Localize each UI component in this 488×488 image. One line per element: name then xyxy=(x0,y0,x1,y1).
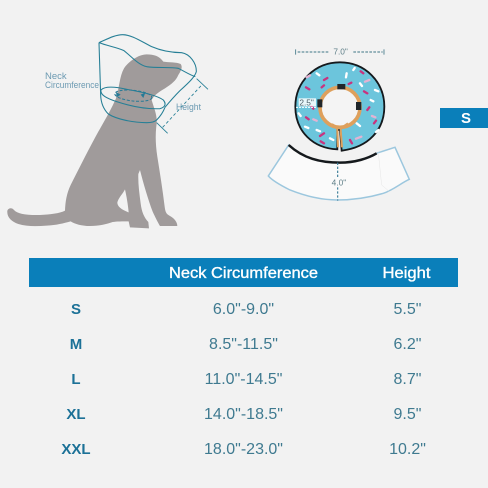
row S: S xyxy=(71,301,81,318)
row M xyxy=(70,336,421,353)
straps xyxy=(337,84,345,89)
label: neck circumference: Neck xyxy=(45,71,67,82)
row L: L xyxy=(71,371,81,388)
row S xyxy=(71,301,421,318)
height dimension 4.0: 4.0" xyxy=(332,177,346,187)
label: 2.5: 2.5" xyxy=(299,98,314,108)
inner ring xyxy=(320,87,360,127)
collar diagram xyxy=(268,47,409,201)
row S: 5.5" xyxy=(394,301,421,318)
height dimension xyxy=(157,79,208,133)
dog diagram with cone: Circumference xyxy=(45,80,99,91)
size table xyxy=(29,258,458,458)
row XL: 9.5" xyxy=(394,406,421,423)
table header: Neck Circumference xyxy=(169,265,318,282)
row L xyxy=(71,371,421,388)
row XL: XL xyxy=(66,406,86,423)
cone outline xyxy=(99,35,196,123)
row L: 8.7" xyxy=(394,371,421,388)
row S: 6.0"-9.0" xyxy=(213,301,274,318)
row M: 6.2" xyxy=(394,336,421,353)
row M: 8.5"-11.5" xyxy=(209,336,278,353)
label: height: Height xyxy=(176,102,201,113)
row XL: 14.0"-18.5" xyxy=(204,406,283,423)
row XXL: 18.0"-23.0" xyxy=(204,441,283,458)
dog diagram with cone xyxy=(7,35,208,228)
height dimension 4.0 xyxy=(332,163,346,201)
neck circumference arrows xyxy=(114,88,152,103)
row XXL: 10.2" xyxy=(389,441,426,458)
row XL xyxy=(66,406,421,423)
dog silhouette xyxy=(7,54,182,228)
table header xyxy=(29,258,458,287)
donut collar xyxy=(295,62,384,151)
size tab xyxy=(440,108,488,128)
width dimension 7.0: 7.0" xyxy=(333,47,348,57)
open cone piece xyxy=(268,145,409,200)
row XXL: XXL xyxy=(61,441,91,458)
sprinkles xyxy=(299,68,378,143)
row XXL xyxy=(61,441,426,458)
width dimension 7.0 xyxy=(296,47,384,57)
table header: Height xyxy=(382,265,431,282)
size tab: S xyxy=(461,110,471,127)
row L: 11.0"-14.5" xyxy=(205,371,282,388)
row M: M xyxy=(70,336,82,353)
